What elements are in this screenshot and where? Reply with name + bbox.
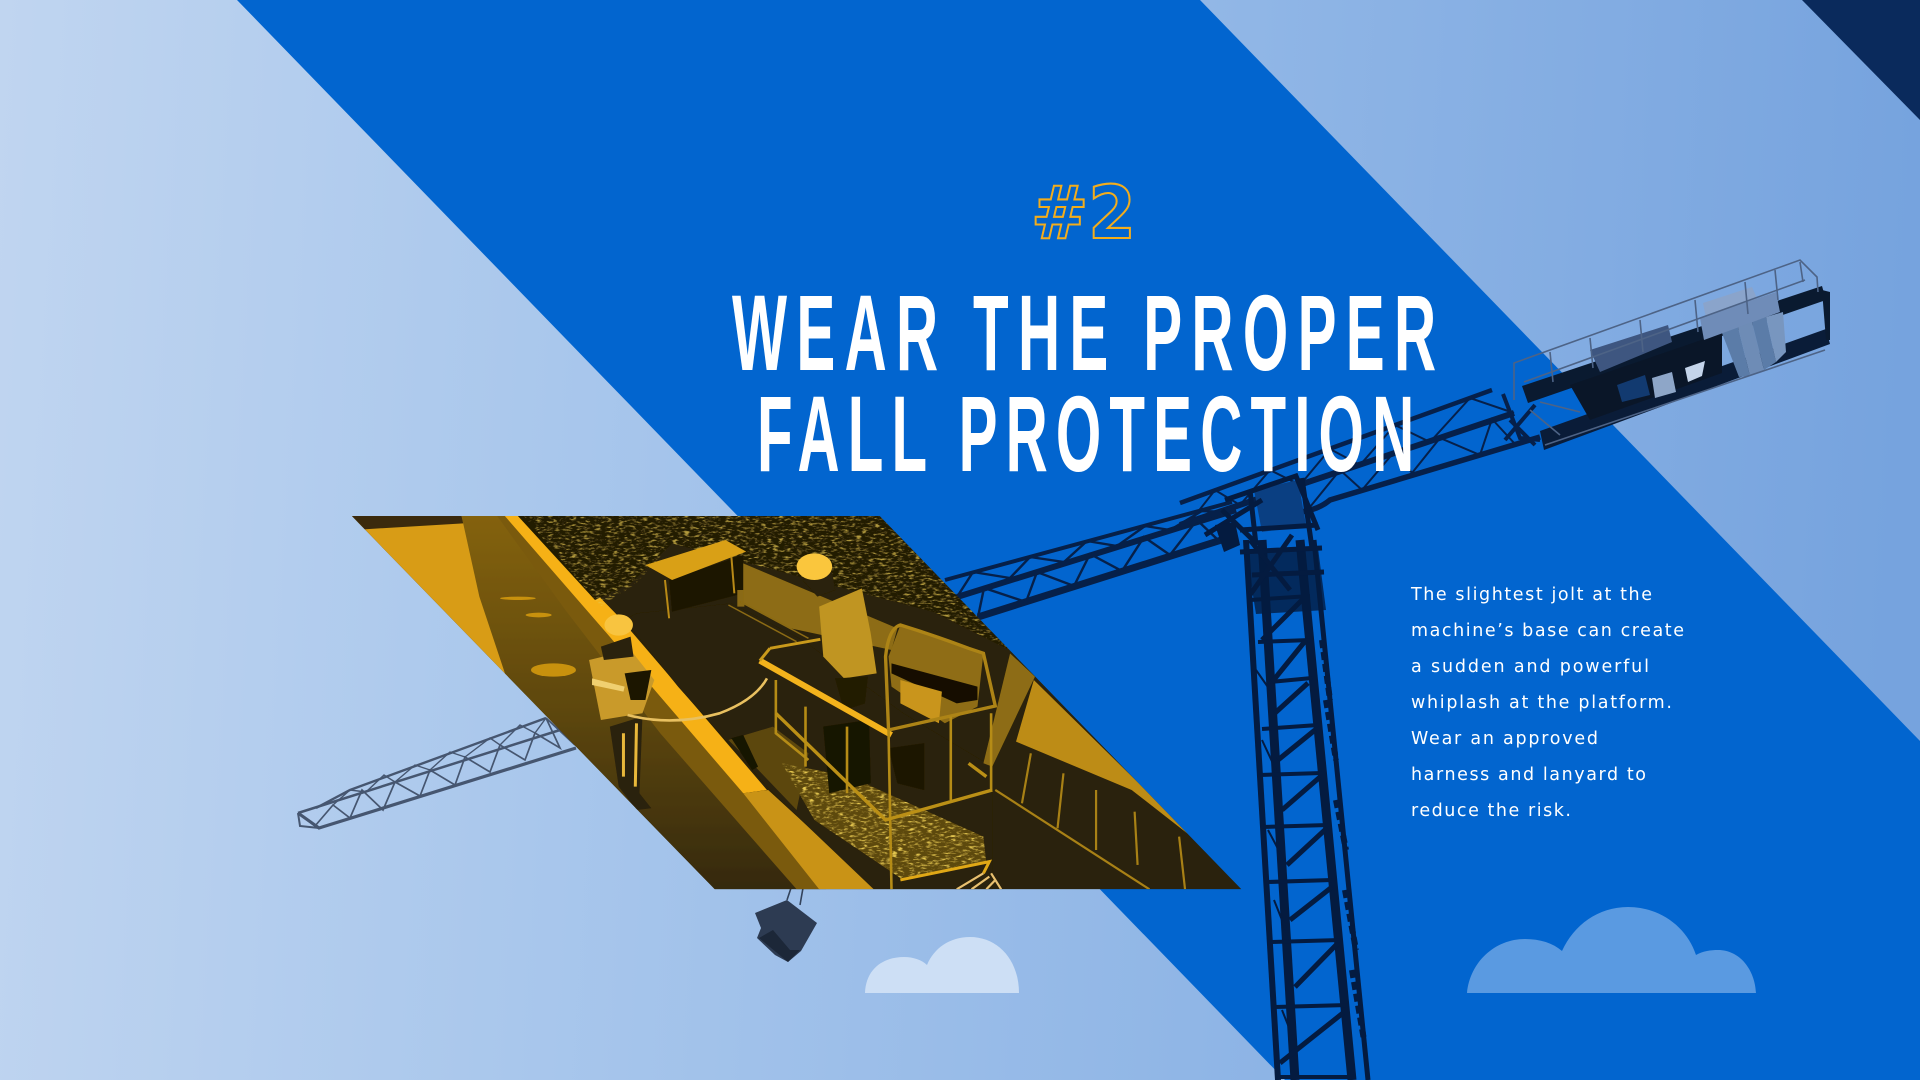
- machine on ground: [728, 727, 808, 810]
- basket rails: [760, 625, 1001, 889]
- photo: workers on lift, duotone: [340, 513, 1253, 893]
- title line 1: WEAR THE PROPER: [732, 273, 1436, 394]
- hanging bucket: [755, 888, 817, 962]
- wall top strip: [505, 516, 767, 793]
- body paragraph: harness and lanyard to: [1411, 765, 1646, 785]
- number heading: #2: [1031, 170, 1136, 256]
- parking lot: [352, 516, 509, 680]
- body paragraph: machine’s base can create: [1411, 621, 1684, 641]
- counter jib lattice: [945, 502, 1236, 617]
- right jib lattice: [1180, 390, 1540, 525]
- lift floor: [782, 763, 986, 880]
- boom arm: [983, 653, 1035, 767]
- right lawn posts: [995, 753, 1185, 889]
- photo base: [340, 513, 1253, 893]
- control panel: [889, 625, 983, 723]
- tower mast: [1246, 540, 1368, 1080]
- tower head: [1205, 476, 1326, 614]
- ladder: [728, 602, 808, 642]
- sidewalk ground: [462, 516, 820, 889]
- corner navy triangle: [1802, 0, 1920, 120]
- courtyard ground: [625, 603, 992, 889]
- cloud: light: [865, 937, 1019, 993]
- left jib arm: [298, 718, 576, 828]
- body paragraph: a sudden and powerful: [1411, 657, 1649, 677]
- right fence wall: [1016, 680, 1188, 834]
- fence: [743, 563, 897, 650]
- lift column: [889, 743, 924, 790]
- body paragraph: The slightest jolt at the: [1410, 585, 1652, 605]
- trees: [518, 516, 1013, 652]
- crane: [298, 260, 1830, 1080]
- worker on ground: [589, 614, 654, 810]
- body paragraph: reduce the risk.: [1411, 801, 1571, 821]
- puddles: [500, 597, 576, 677]
- title: [732, 273, 1436, 495]
- cloud: blue: [1467, 907, 1756, 993]
- machinery deck: [1514, 260, 1830, 450]
- lanyard: [628, 678, 767, 720]
- body paragraph: whiplash at the platform.: [1411, 693, 1672, 713]
- shed: [645, 540, 746, 618]
- wall face: [497, 516, 826, 889]
- title line 2: FALL PROTECTION: [757, 374, 1414, 495]
- body paragraph: Wear an approved: [1411, 729, 1598, 749]
- body paragraph: [1410, 585, 1684, 821]
- worker on lift: [797, 553, 877, 793]
